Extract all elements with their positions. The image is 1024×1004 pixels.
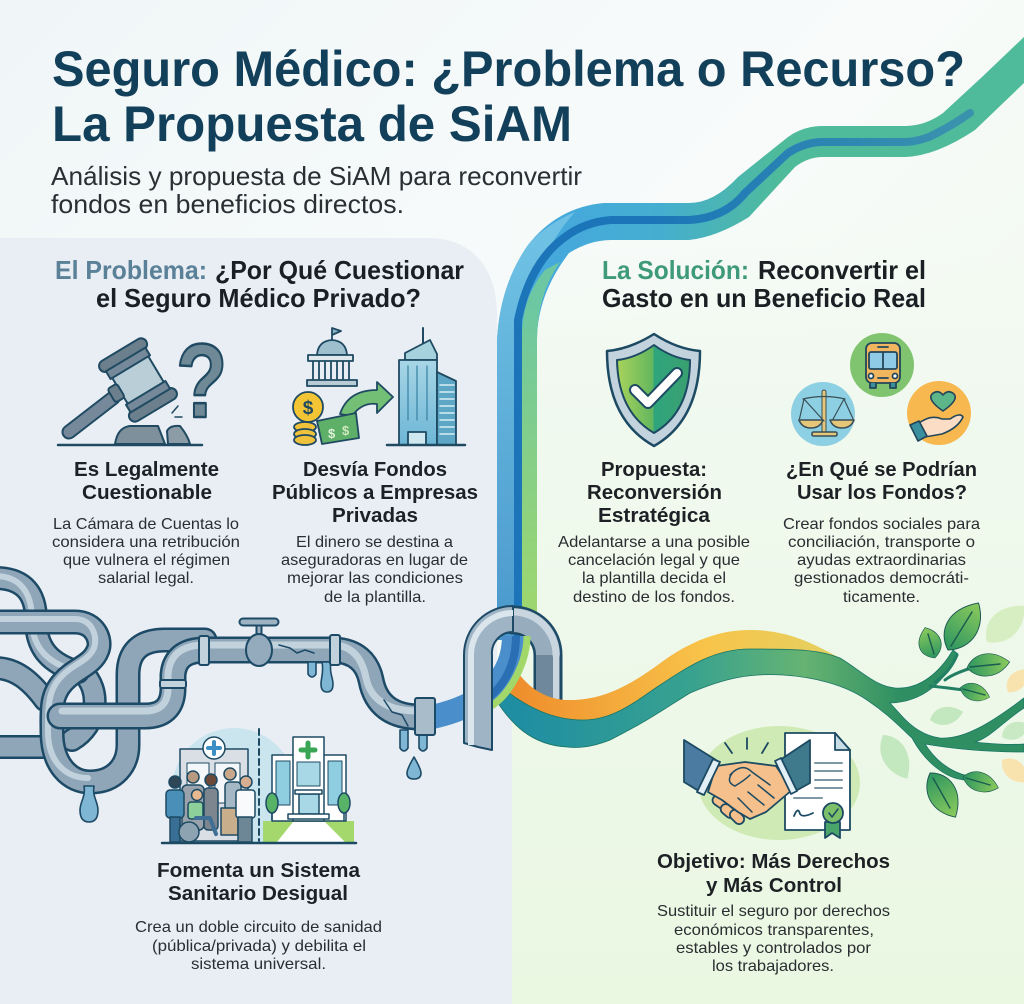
block: Objetivo xyxy=(657,851,890,975)
blue pipe link into ribbon xyxy=(432,636,527,717)
block: Propuesta: la plantilla decida el xyxy=(582,570,726,587)
icon: shield with check xyxy=(607,334,700,446)
icon: gavel and question mark: ? xyxy=(176,323,227,440)
block: En Qué se Podrían Usar xyxy=(783,459,980,606)
block: Fomenta un Sistema: Fomenta un Sistema xyxy=(157,860,361,882)
subtitle: fondos en beneficios directos. xyxy=(51,189,404,219)
tangled leaking pipes xyxy=(0,576,427,822)
block: Es Legalmente Cuestionable: salarial legal. xyxy=(98,570,194,587)
block: En Qué se Podrían Usar: Usar los Fondos? xyxy=(797,482,967,504)
icon: public funds diverted to corporate tower xyxy=(293,328,465,445)
heading: El Problema: el Seguro Médico Privado? xyxy=(96,283,421,313)
panel: problem background xyxy=(0,238,512,1004)
block: Objetivo: económicos transparentes, xyxy=(674,922,874,939)
right hospital xyxy=(263,737,354,842)
block: Desvía Fondos: Privadas xyxy=(332,505,418,527)
blue-green flowing ribbon xyxy=(497,37,1024,640)
icon: hand with heart xyxy=(907,381,971,445)
block: Fomenta un Sistema: sistema universal. xyxy=(191,956,326,973)
title: La Propuesta de SiAM xyxy=(52,96,572,152)
block: Propuesta: Reconversión xyxy=(587,482,722,504)
block: Desvía Fondos: Públicos a Empresas xyxy=(272,482,478,504)
block: En Qué se Podrían Usar: gestionados democráti- xyxy=(794,570,969,587)
block: Objetivo: los trabajadores. xyxy=(712,958,834,975)
icon: bus xyxy=(850,333,914,397)
heading: El Problema xyxy=(55,255,464,313)
block: Objetivo: Sustituir el seguro por derechos xyxy=(657,903,890,920)
block: Objetivo: Objetivo: Más Derechos xyxy=(657,851,890,873)
block: Objetivo: y Más Control xyxy=(706,875,842,897)
orange and teal ribbon becoming a tree xyxy=(496,630,1024,780)
block: En Qué se Podrían Usar: ayudas extraordinarias xyxy=(797,552,966,569)
icon: hospitals, two-tier health system xyxy=(162,728,356,843)
block: Desvía Fondos: Desvía Fondos xyxy=(303,459,447,481)
hand fingers xyxy=(711,793,746,826)
block: Fomenta un Sistema xyxy=(135,860,382,973)
icon: scales xyxy=(791,382,855,446)
icon: gavel and question mark xyxy=(58,323,227,445)
pipe flanges xyxy=(160,635,435,735)
block: Propuesta: destino de los fondos. xyxy=(573,589,735,606)
heading: El Problema: El Problema: xyxy=(55,255,207,285)
block: En Qué se Podrían Usar: ticamente. xyxy=(843,589,920,606)
heading: La Solución xyxy=(602,255,926,313)
tree branches with leaves xyxy=(872,594,1024,824)
block: Es Legalmente Cuestionable: Es Legalmente xyxy=(74,459,219,481)
block: En Qué se Podrían Usar: ¿En Qué se Podrían xyxy=(786,459,977,481)
block: Propuesta xyxy=(558,459,750,606)
pale background leaves xyxy=(872,596,1024,789)
block: En Qué se Podrían Usar: Crear fondos sociales para xyxy=(783,516,980,533)
subtitle: Análisis y propuesta de SiAM para reconvertir xyxy=(51,161,582,191)
left clinic xyxy=(180,737,248,841)
block: Fomenta un Sistema: (pública/privada) y debilita el xyxy=(152,938,366,955)
pipe: main line with valve xyxy=(60,622,420,726)
panel: solution background xyxy=(512,200,1024,1004)
icon: handshake and signed document xyxy=(684,726,860,840)
icon: fund uses circles xyxy=(791,333,971,446)
arch pipe xyxy=(513,612,556,705)
heading: La Solución: Gasto en un Beneficio Real xyxy=(602,283,926,313)
water drips xyxy=(80,662,427,822)
crowd of patients xyxy=(166,768,255,842)
block: Propuesta: Propuesta: xyxy=(601,459,707,481)
heading: La Solución: La Solución: xyxy=(602,255,749,285)
block: Desvía Fondos xyxy=(272,459,478,606)
block: Es Legalmente Cuestionable: que vulnera el régimen xyxy=(63,552,230,569)
heading: El Problema: ¿Por Qué Cuestionar xyxy=(215,255,464,285)
block: Es Legalmente Cuestionable: considera una retribución xyxy=(52,534,240,551)
arch pipe front leg xyxy=(464,606,513,750)
block: Propuesta: cancelación legal y que xyxy=(568,552,740,569)
pipe: back loops xyxy=(0,668,95,747)
block: Propuesta: Adelantarse a una posible xyxy=(558,534,750,551)
icon: public funds diverted to corporate tower: $ xyxy=(328,426,336,441)
icon: public funds diverted to corporate tower: $ xyxy=(303,398,314,419)
block: Propuesta: Estratégica xyxy=(598,505,711,527)
block: Es Legalmente Cuestionable: Cuestionable xyxy=(82,482,212,504)
block: Fomenta un Sistema: Crea un doble circuito de sanidad xyxy=(135,919,382,936)
icon: public funds diverted to corporate tower: $ xyxy=(342,423,350,438)
block: Objetivo: estables y controlados por xyxy=(676,940,872,957)
block: Desvía Fondos: aseguradoras en lugar de xyxy=(281,552,468,569)
leaf midribs xyxy=(928,612,1000,808)
subtitle xyxy=(51,161,582,219)
block: Desvía Fondos: mejorar las condiciones xyxy=(287,570,463,587)
block: Es Legalmente Cuestionable: La Cámara de Cuentas lo xyxy=(53,516,239,533)
title: Seguro Médico: ¿Problema o Recurso? xyxy=(52,41,965,97)
title xyxy=(52,41,965,152)
leaves xyxy=(914,594,1011,824)
heading: La Solución: Reconvertir el xyxy=(758,255,926,285)
block: Desvía Fondos: de la plantilla. xyxy=(324,589,426,606)
block: Fomenta un Sistema: Sanitario Desigual xyxy=(168,883,348,905)
block: En Qué se Podrían Usar: conciliación, transporte o xyxy=(788,534,975,551)
block: Desvía Fondos: El dinero se destina a xyxy=(296,534,453,551)
pipe: top left and lower loop xyxy=(0,576,205,782)
block: Es Legalmente Cuestionable xyxy=(52,459,240,587)
